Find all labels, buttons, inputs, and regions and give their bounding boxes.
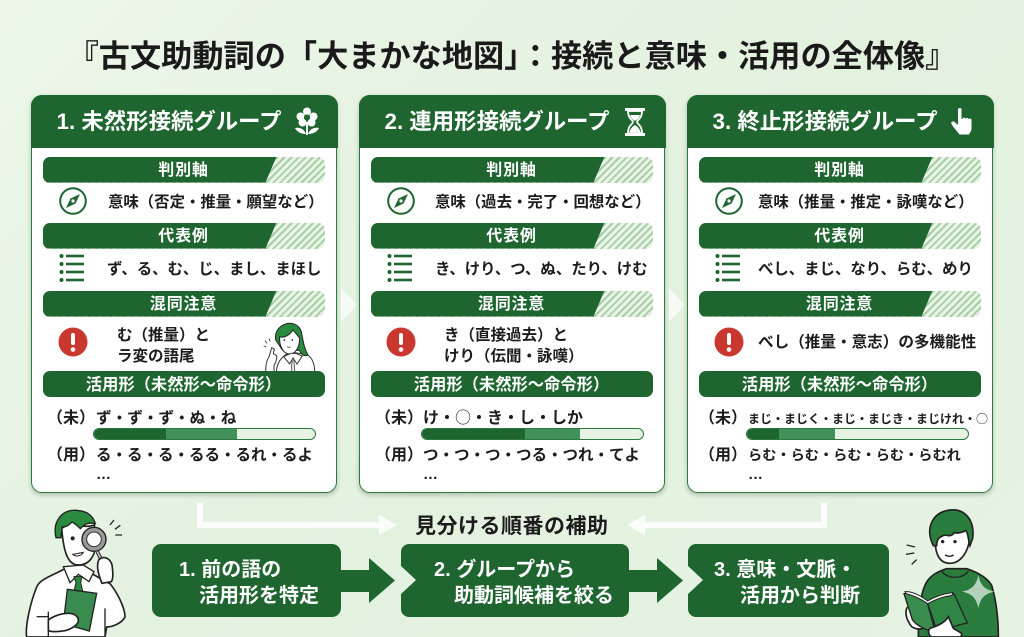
section bar: 混同注意: 混同注意 (806, 296, 873, 312)
ellipsis: … (423, 466, 438, 483)
illustration: man with magnifying glass (26, 510, 126, 637)
icon: hourglass (625, 108, 645, 136)
section bar: 混同注意: 混同注意 (150, 296, 217, 312)
panel: 1. 未然形接続グループ (31, 95, 337, 493)
panel header (358, 94, 666, 148)
arrow: step 2 to 3 (629, 558, 683, 603)
section bar: 代表例: 代表例 (486, 228, 537, 244)
conjugation forms: 用: らむ・らむ・らむ・らむ・らむれ (748, 448, 961, 464)
arrow: white connector right (628, 503, 827, 535)
section bar: 判別軸: 判別軸 (814, 162, 865, 178)
step text (179, 558, 319, 607)
step 1 (152, 544, 341, 617)
arrow: white connector left (197, 503, 396, 535)
step 2 (401, 544, 629, 617)
section bar: 判別軸: 判別軸 (486, 162, 537, 178)
progress bar (420, 428, 644, 440)
icon: compass (387, 187, 415, 215)
conjugation row: 用: （用） (47, 447, 95, 464)
icon: flower (295, 108, 319, 135)
section bar: 混同注意 (370, 290, 652, 316)
text: 混同注意 (444, 326, 584, 365)
section bar: 活用形: 活用形（未然形〜命令形） (86, 376, 281, 394)
icon: list (388, 254, 412, 282)
text: 混同注意: む（推量）と (117, 327, 210, 344)
section bar: 代表例 (42, 222, 324, 248)
section bar: 判別軸 (370, 156, 652, 182)
panel: 3. 終止形接続グループ (687, 95, 993, 493)
title: 『古文助動詞の「大まかな地図」：接続と意味・活用の全体像』 (68, 39, 956, 74)
section bar: 代表例: 代表例 (158, 228, 209, 244)
text: 判別軸: 意味（否定・推量・願望など） (108, 194, 323, 211)
section bar: 混同注意: 混同注意 (478, 296, 545, 312)
step text (714, 558, 860, 607)
icon: compass (59, 187, 87, 215)
text: 混同注意 (117, 326, 210, 365)
heading: 2. 連用形接続グループ (384, 108, 610, 134)
text: 混同注意: ラ変の語尾 (117, 348, 195, 365)
illustration: man reading book (903, 509, 1000, 637)
section bar: 混同注意 (698, 290, 980, 316)
step box (688, 544, 889, 617)
conjugation forms: 未: け・○・き・し・しか (423, 404, 583, 428)
conjugation forms: 未: ず・ず・ず・ぬ・ね (96, 410, 236, 427)
icon: alert (58, 328, 88, 356)
section bar: 活用形 (370, 370, 652, 396)
progress bar (746, 428, 968, 440)
text: 代表例: べし、まじ、なり、らむ、めり (758, 261, 973, 278)
arrow: step 1 to 2 (341, 558, 395, 603)
section bar: 判別軸 (42, 156, 324, 182)
conjugation forms: 用: る・る・る・るる・るれ・るよ (96, 447, 313, 464)
section bar: 代表例: 代表例 (814, 228, 865, 244)
panel header (30, 94, 338, 148)
icon: alert (386, 328, 416, 356)
panel: 2. 連用形接続グループ (359, 95, 665, 493)
ellipsis: … (96, 466, 111, 483)
conjugation row: 用: （用） (375, 447, 423, 464)
ellipsis: … (748, 466, 763, 483)
text: 混同注意: べし（推量・意志）の多機能性 (758, 334, 976, 351)
text: 代表例: き、けり、つ、ぬ、たり、けむ (435, 261, 648, 278)
section bar: 混同注意 (42, 290, 324, 316)
conjugation row: 用: （用） (699, 447, 747, 464)
section bar: 活用形 (42, 370, 324, 396)
section bar: 活用形 (698, 370, 980, 396)
section bar: 代表例 (698, 222, 980, 248)
conjugation row: 未: （未） (375, 410, 423, 427)
step 3 (688, 544, 889, 617)
step text: 助動詞候補を絞る (454, 585, 614, 607)
icon: list (60, 254, 84, 282)
label: 見分ける順番の補助: 見分ける順番の補助 (415, 515, 608, 538)
step text: 3. 意味・文脈・ (714, 559, 856, 581)
text: 代表例: ず、る、む、じ、まし、まほし (107, 261, 321, 278)
conjugation forms: 用: つ・つ・つ・つる・つれ・てよ (423, 447, 640, 464)
section bar: 活用形: 活用形（未然形〜命令形） (414, 376, 609, 394)
illustration: woman pointing (264, 322, 316, 371)
step box (152, 544, 341, 617)
icon: alert (714, 328, 744, 356)
heading: 3. 終止形接続グループ (712, 108, 938, 134)
section bar: 活用形: 活用形（未然形〜命令形） (742, 376, 937, 394)
step text: 1. 前の語の (179, 559, 281, 581)
step text: 活用形を特定 (199, 585, 319, 607)
heading: 1. 未然形接続グループ (56, 108, 282, 134)
text: 判別軸: 意味（過去・完了・回想など） (435, 194, 650, 211)
step text: 活用から判断 (740, 585, 860, 607)
text: 混同注意: けり（伝聞・詠嘆） (444, 348, 584, 365)
conjugation forms: 未: まじ・まじく・まじ・まじき・まじけれ・○ (748, 410, 988, 427)
text: 混同注意: き（直接過去）と (444, 327, 568, 344)
step text: 2. グループから (434, 559, 575, 581)
step text (434, 558, 614, 607)
panel header (686, 94, 994, 148)
section bar: 判別軸: 判別軸 (158, 162, 209, 178)
icon: compass (715, 187, 743, 215)
section bar: 代表例 (370, 222, 652, 248)
conjugation row: 未: （未） (47, 410, 95, 427)
conjugation row: 未: （未） (699, 410, 747, 427)
icon: list (716, 254, 740, 282)
arrow: card 1 to 2 (341, 288, 357, 322)
text: 判別軸: 意味（推量・推定・詠嘆など） (758, 194, 973, 211)
progress bar (92, 428, 316, 440)
section bar: 判別軸 (698, 156, 980, 182)
step box (401, 544, 629, 617)
arrow: card 2 to 3 (669, 288, 685, 322)
icon: pointing hand (951, 108, 972, 134)
